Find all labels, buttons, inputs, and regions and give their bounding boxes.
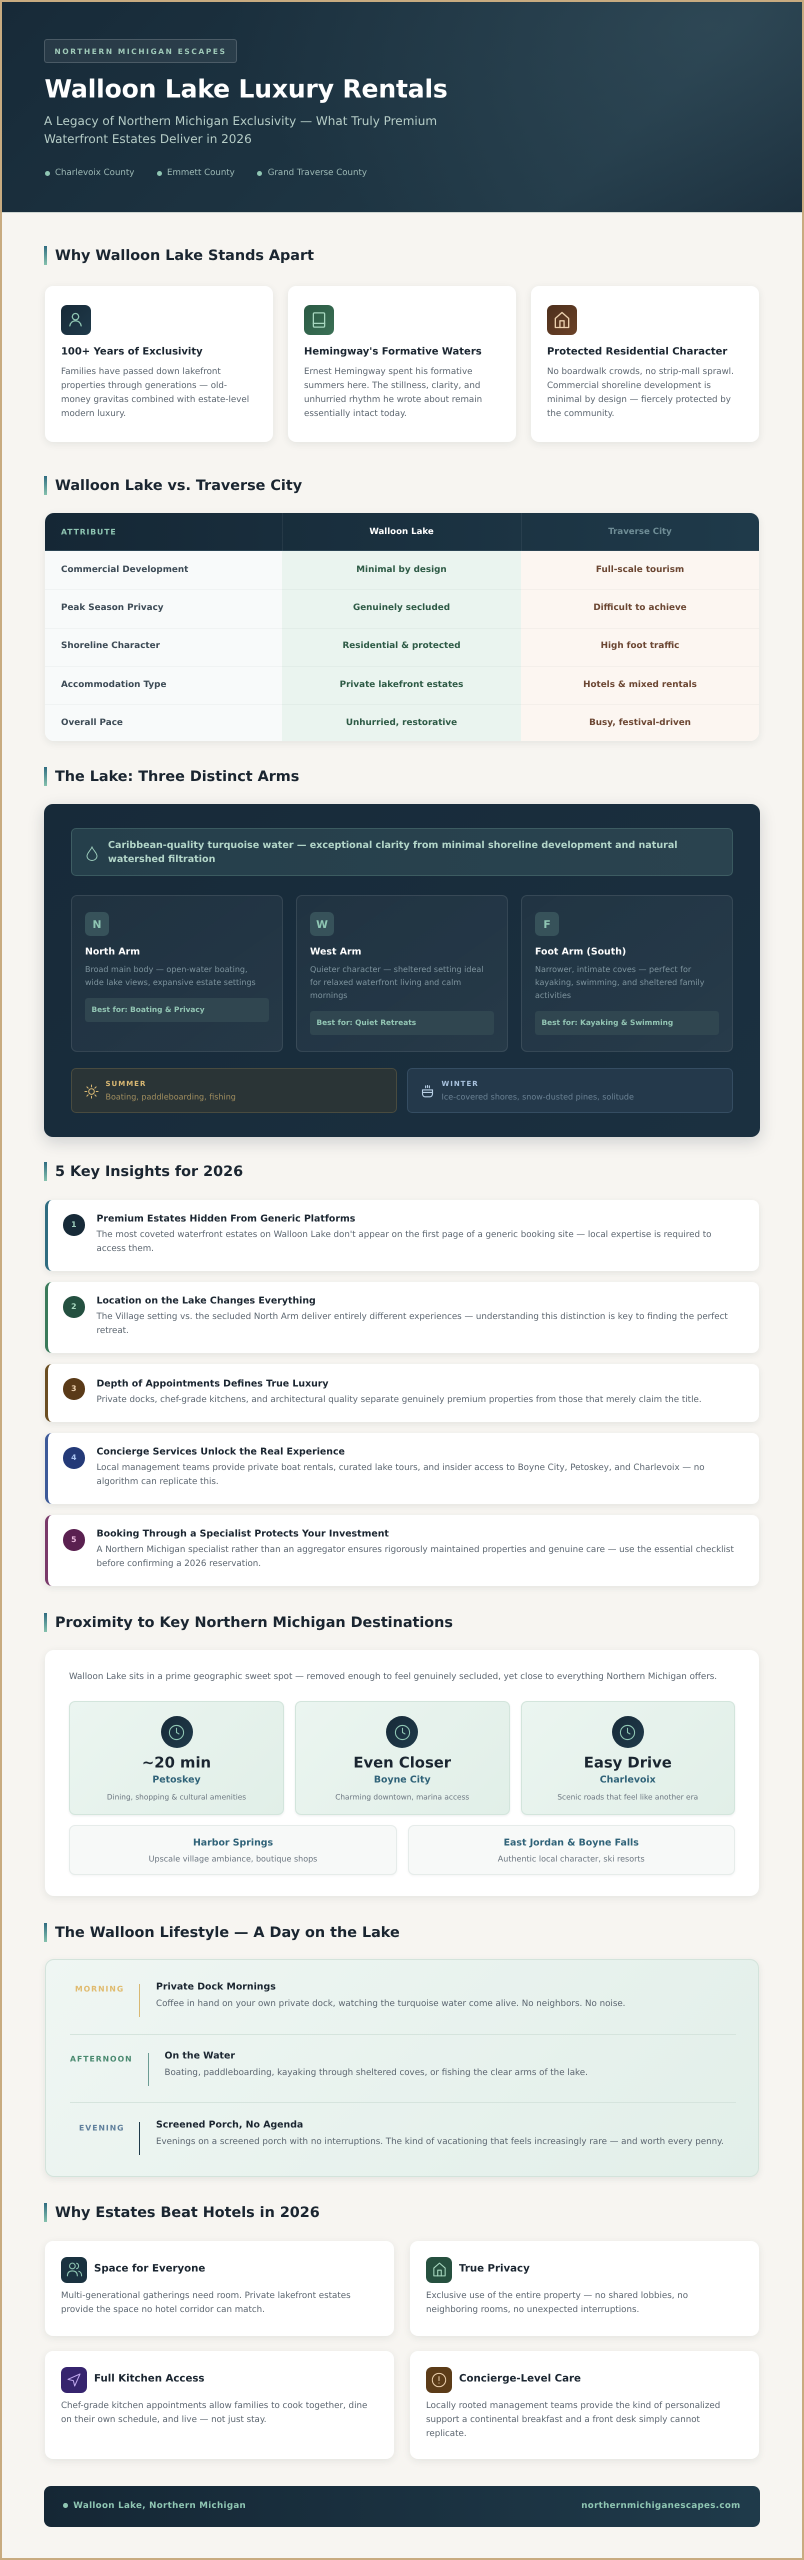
row: overall pace: Unhurried, restorative bbox=[346, 718, 457, 728]
icon: clock bbox=[160, 1716, 192, 1748]
time label: AFTERNOON bbox=[70, 2054, 133, 2063]
badge F: F bbox=[543, 918, 551, 930]
insight text: Local management teams provide private boat rentals, curated lake tours, and insider access to Boyne City, Petoskey, and Charlevoix — no bbox=[96, 1463, 705, 1473]
row: overall pace: Overall Pace bbox=[61, 718, 123, 728]
card: kitchen bbox=[45, 2350, 394, 2459]
card: west arm bbox=[296, 895, 508, 1052]
insight text bbox=[96, 1545, 734, 1569]
card: north arm bbox=[71, 895, 283, 1052]
destination: boyne city bbox=[295, 1701, 510, 1815]
best for: Best for: Boating & Privacy bbox=[92, 1005, 205, 1014]
card text: No boardwalk crowds, no strip-mall sprawl. bbox=[547, 367, 734, 377]
table header: Walloon Lake bbox=[369, 527, 434, 537]
arm text: wide lake views, expansive estate settings bbox=[85, 978, 256, 987]
card text: neighboring rooms, no unexpected interruptions. bbox=[426, 2305, 639, 2315]
insight 5 bbox=[45, 1515, 759, 1586]
card text bbox=[426, 2401, 720, 2439]
arm title: North Arm bbox=[85, 946, 140, 957]
row: shoreline character bbox=[61, 641, 679, 651]
insight text: The most coveted waterfront estates on Walloon Lake don't appear on the first page of a generic booking site — local expertise is required to bbox=[96, 1230, 711, 1240]
card text: money gravitas combined with estate-level bbox=[61, 395, 249, 405]
card text: essentially intact today. bbox=[304, 409, 407, 419]
row: accommodation type: Hotels & mixed rentals bbox=[583, 680, 697, 690]
season text: Ice-covered shores, snow-dusted pines, solitude bbox=[442, 1092, 634, 1102]
best for bbox=[310, 1011, 494, 1035]
card text bbox=[426, 2291, 688, 2315]
table header: Traverse City bbox=[608, 527, 672, 537]
table header bbox=[45, 513, 759, 551]
insight text: Private docks, chef-grade kitchens, and architectural quality separate genuinely premium properties from those that merely claim the title. bbox=[96, 1394, 702, 1404]
insight title: Location on the Lake Changes Everything bbox=[96, 1296, 316, 1306]
card: hemingway bbox=[288, 286, 516, 442]
arm text: Quieter character — sheltered setting ideal bbox=[310, 965, 484, 974]
time: Easy Drive bbox=[584, 1754, 672, 1772]
insight 1 bbox=[45, 1200, 759, 1271]
county tags: Charlevoix County bbox=[55, 168, 134, 178]
arm title: Foot Arm (South) bbox=[535, 946, 626, 957]
icon: alert circle bbox=[426, 2366, 452, 2392]
card text bbox=[547, 367, 734, 419]
insight title: Booking Through a Specialist Protects Your Investment bbox=[96, 1528, 389, 1540]
destination: harbor springs bbox=[69, 1825, 397, 1875]
card text: Chef-grade kitchen appointments allow families to cook together, dine bbox=[61, 2401, 367, 2411]
row: shoreline character: High foot traffic bbox=[601, 641, 679, 651]
row: overall pace: Busy, festival-driven bbox=[589, 718, 691, 728]
number: 5 bbox=[71, 1535, 76, 1544]
row: accommodation type: Private lakefront estates bbox=[340, 680, 463, 690]
row: peak season privacy: Genuinely secluded bbox=[353, 603, 450, 613]
insight text: retreat. bbox=[96, 1326, 129, 1336]
icon: water drop bbox=[86, 846, 98, 861]
callout text: Caribbean-quality turquoise water — exceptional clarity from minimal shoreline development and natural bbox=[108, 840, 678, 851]
arm text: Narrower, intimate coves — perfect for bbox=[535, 965, 691, 974]
heading: proximity: Proximity to Key Northern Michigan Destinations bbox=[55, 1614, 453, 1630]
number: 2 bbox=[71, 1302, 76, 1311]
best for bbox=[535, 1011, 719, 1035]
card text: the community. bbox=[547, 409, 614, 419]
county tags: Grand Traverse County bbox=[268, 168, 367, 178]
row: peak season privacy: Peak Season Privacy bbox=[61, 603, 164, 613]
heading: lifestyle: The Walloon Lifestyle — A Day on the Lake bbox=[55, 1924, 400, 1940]
intro text: Walloon Lake sits in a prime geographic sweet spot — removed enough to feel genuinely secluded, yet close to everything Northern Michigan offers. bbox=[69, 1672, 717, 1682]
card text: modern luxury. bbox=[61, 409, 126, 419]
county tags bbox=[45, 168, 367, 178]
insight 4 bbox=[45, 1433, 759, 1504]
card text bbox=[304, 367, 482, 419]
card text: properties through generations — old- bbox=[61, 381, 227, 391]
row text: Evenings on a screened porch with no interruptions. The kind of vacationing that feels increasingly rare — and worth every penny. bbox=[156, 2137, 724, 2147]
icon: person bbox=[61, 304, 90, 334]
card text: Families have passed down lakefront bbox=[61, 367, 221, 377]
arm title: West Arm bbox=[310, 946, 361, 957]
place: Petoskey bbox=[152, 1774, 201, 1785]
panel: proximity bbox=[45, 1650, 759, 1896]
time label: EVENING bbox=[79, 2123, 124, 2132]
row: commercial development: Minimal by design bbox=[356, 565, 447, 575]
card text: Multi-generational gatherings need room. Private lakefront estates bbox=[61, 2291, 351, 2301]
subtitle: Waterfront Estates Deliver in 2026 bbox=[44, 132, 252, 146]
row: morning bbox=[75, 1982, 625, 2017]
season label: WINTER bbox=[442, 1080, 479, 1088]
place: Harbor Springs bbox=[193, 1837, 273, 1848]
insight text bbox=[96, 1463, 705, 1487]
row: accommodation type: Accommodation Type bbox=[61, 680, 166, 690]
card text: Ernest Hemingway spent his formative bbox=[304, 367, 472, 377]
card: privacy bbox=[410, 2241, 759, 2336]
row: commercial development: Commercial Development bbox=[61, 565, 188, 575]
card: concierge bbox=[410, 2350, 759, 2459]
number bbox=[63, 1378, 84, 1400]
badge F bbox=[535, 912, 559, 936]
icon: clock bbox=[386, 1716, 418, 1748]
card text: replicate. bbox=[426, 2429, 467, 2439]
insight text: The Village setting vs. the secluded North Arm deliver entirely different experiences — understanding this distinction is key to finding the perfect bbox=[96, 1312, 728, 1322]
icon: users bbox=[61, 2256, 87, 2282]
card text: summers here. The stillness, clarity, and bbox=[304, 381, 480, 391]
row: peak season privacy bbox=[61, 603, 687, 613]
header banner bbox=[0, 0, 804, 213]
row: shoreline character: Residential & protected bbox=[342, 641, 461, 651]
panel: lifestyle bbox=[45, 1959, 759, 2177]
best for: Best for: Kayaking & Swimming bbox=[542, 1018, 673, 1027]
row: peak season privacy: Difficult to achieve bbox=[593, 603, 687, 613]
icon: clock bbox=[612, 1716, 644, 1748]
panel: lake bbox=[44, 804, 760, 1137]
detail: Scenic roads that feel like another era bbox=[557, 1792, 698, 1801]
number bbox=[63, 1529, 84, 1550]
card title: Full Kitchen Access bbox=[94, 2374, 204, 2384]
card: foot arm bbox=[521, 895, 733, 1052]
detail: Authentic local character, ski resorts bbox=[498, 1854, 645, 1863]
card title: Concierge-Level Care bbox=[459, 2374, 581, 2384]
card title: 100+ Years of Exclusivity bbox=[61, 346, 203, 358]
heading: the lake: The Lake: Three Distinct Arms bbox=[55, 768, 299, 784]
icon: book bbox=[304, 304, 334, 334]
row text: Coffee in hand on your own private dock, watching the turquoise water come alive. No neighbors. No noise. bbox=[156, 1999, 625, 2009]
heading: insights: 5 Key Insights for 2026 bbox=[55, 1164, 243, 1180]
insight title: Depth of Appointments Defines True Luxury bbox=[96, 1378, 329, 1389]
callout: water bbox=[71, 828, 733, 876]
number: 4 bbox=[71, 1453, 76, 1462]
card text bbox=[61, 367, 249, 419]
time: ~20 min bbox=[142, 1754, 211, 1772]
card text: minimal by design — fiercely protected by bbox=[547, 395, 731, 405]
icon: cup bbox=[422, 1085, 434, 1098]
destination: charlevoix bbox=[520, 1701, 735, 1815]
card text: Locally rooted management teams provide the kind of personalized bbox=[426, 2401, 720, 2411]
arm text bbox=[85, 965, 256, 987]
time label: MORNING bbox=[75, 1984, 124, 1994]
number bbox=[63, 1447, 84, 1468]
row: accommodation type bbox=[61, 680, 697, 690]
insight 3 bbox=[45, 1364, 759, 1422]
insight text bbox=[96, 1230, 711, 1254]
card title: Protected Residential Character bbox=[547, 346, 727, 358]
season label: SUMMER bbox=[106, 1080, 146, 1088]
badge N: N bbox=[93, 918, 101, 930]
season text: Boating, paddleboarding, fishing bbox=[106, 1092, 236, 1102]
insight text: access them. bbox=[96, 1244, 154, 1254]
insight 2 bbox=[45, 1282, 759, 1353]
website: northernmichiganescapes.com bbox=[581, 2500, 740, 2510]
card text: Commercial shoreline development is bbox=[547, 381, 711, 391]
insight title: Concierge Services Unlock the Real Experience bbox=[96, 1446, 345, 1458]
row text: Boating, paddleboarding, kayaking through sheltered coves, or fishing the clear arms of the lake. bbox=[164, 2068, 588, 2078]
subtitle bbox=[44, 114, 437, 146]
row: commercial development bbox=[61, 565, 684, 575]
place: Charlevoix bbox=[600, 1774, 656, 1785]
icon: navigation bbox=[61, 2366, 87, 2392]
row title: On the Water bbox=[164, 2050, 235, 2062]
card text: support a continental breakfast and a front desk simply cannot bbox=[426, 2415, 700, 2425]
detail: Dining, shopping & cultural amenities bbox=[107, 1792, 246, 1801]
insight title: Premium Estates Hidden From Generic Platforms bbox=[96, 1214, 355, 1224]
heading: why walloon: Why Walloon Lake Stands Apart bbox=[55, 248, 314, 264]
insight text: before confirming a 2026 reservation. bbox=[96, 1559, 261, 1569]
row: overall pace bbox=[61, 718, 691, 728]
insight text: A Northern Michigan specialist rather than an aggregator ensures rigorously maintained properties and genuine care — use the essential checklist bbox=[96, 1545, 734, 1555]
insight text bbox=[96, 1312, 728, 1336]
detail: Upscale village ambiance, boutique shops bbox=[149, 1854, 317, 1863]
callout text: watershed filtration bbox=[108, 854, 215, 865]
arm text: Broad main body — open-water boating, bbox=[85, 965, 248, 974]
place: East Jordan & Boyne Falls bbox=[504, 1837, 639, 1848]
destination: east jordan bbox=[408, 1825, 735, 1875]
card text: Exclusive use of the entire property — no shared lobbies, no bbox=[426, 2291, 688, 2301]
arm text: mornings bbox=[310, 991, 347, 1000]
arm text: for relaxed waterfront living and calm bbox=[310, 978, 461, 987]
number: 1 bbox=[71, 1220, 76, 1229]
season: winter bbox=[407, 1068, 733, 1113]
number: 3 bbox=[71, 1384, 76, 1393]
arm text: activities bbox=[535, 991, 571, 1000]
arm text: kayaking, swimming, and sheltered family bbox=[535, 978, 704, 987]
callout text bbox=[108, 840, 678, 865]
card title: Hemingway's Formative Waters bbox=[304, 346, 482, 358]
badge N bbox=[85, 912, 109, 936]
arm text bbox=[310, 965, 484, 1000]
heading: estates: Why Estates Beat Hotels in 2026 bbox=[55, 2204, 320, 2220]
icon: house bbox=[426, 2256, 452, 2282]
card: exclusivity bbox=[45, 286, 273, 442]
card text: on their own schedule, and live — not just stay. bbox=[61, 2415, 267, 2425]
row title: Private Dock Mornings bbox=[156, 1982, 276, 1992]
comparison table bbox=[45, 513, 759, 741]
number bbox=[63, 1214, 84, 1236]
destination: petoskey bbox=[69, 1701, 284, 1815]
column backgrounds bbox=[45, 551, 282, 741]
location: Walloon Lake, Northern Michigan bbox=[73, 2500, 246, 2510]
card text bbox=[61, 2291, 351, 2315]
card text bbox=[61, 2401, 367, 2425]
best for: Best for: Quiet Retreats bbox=[316, 1018, 416, 1027]
arm text bbox=[535, 965, 704, 1000]
row: evening bbox=[79, 2120, 724, 2155]
card title: Space for Everyone bbox=[94, 2264, 205, 2274]
detail: Charming downtown, marina access bbox=[335, 1792, 469, 1801]
number bbox=[63, 1296, 84, 1318]
icon: house bbox=[547, 304, 576, 334]
season: summer bbox=[71, 1068, 397, 1113]
badge W bbox=[310, 912, 334, 936]
row title: Screened Porch, No Agenda bbox=[156, 2120, 303, 2130]
footer bar bbox=[44, 2486, 760, 2527]
card: residential bbox=[531, 286, 759, 442]
best for bbox=[85, 998, 269, 1022]
place: Boyne City bbox=[374, 1774, 431, 1785]
badge bbox=[44, 39, 237, 63]
row: commercial development: Full-scale tourism bbox=[596, 565, 684, 575]
insight text: algorithm can replicate this. bbox=[96, 1477, 219, 1487]
card: space bbox=[45, 2241, 394, 2336]
badge: NORTHERN MICHIGAN ESCAPES bbox=[54, 47, 227, 56]
county tags: Emmett County bbox=[167, 168, 235, 178]
badge W: W bbox=[316, 918, 328, 930]
time: Even Closer bbox=[353, 1754, 451, 1772]
row: afternoon bbox=[70, 2050, 588, 2086]
card text: provide the space no hotel corridor can match. bbox=[61, 2305, 265, 2315]
card title: True Privacy bbox=[459, 2264, 530, 2274]
subtitle: A Legacy of Northern Michigan Exclusivity — What Truly Premium bbox=[44, 114, 437, 128]
title: Walloon Lake Luxury Rentals bbox=[44, 74, 448, 104]
row: shoreline character: Shoreline Character bbox=[61, 641, 160, 651]
table header: ATTRIBUTE bbox=[61, 528, 116, 536]
icon: sun bbox=[84, 1084, 98, 1099]
heading: comparison: Walloon Lake vs. Traverse City bbox=[55, 478, 302, 494]
card text: unhurried rhythm he wrote about remain bbox=[304, 395, 482, 405]
